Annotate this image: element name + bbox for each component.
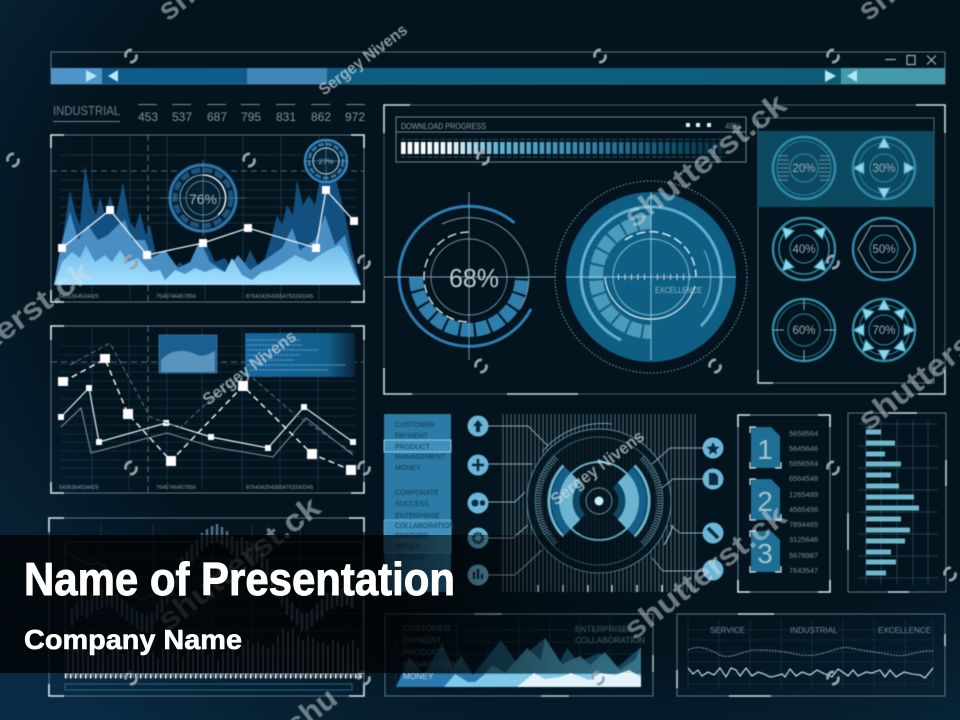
panel: layered area chart: PAYMENT: [403, 635, 442, 645]
panel: wave chart: INDUSTRIAL: [790, 626, 838, 635]
number row: 862: [311, 110, 331, 124]
watermark: shutterstock text: shutterst.ck: [617, 498, 793, 647]
dial: 60%: [773, 299, 835, 361]
icon: camera: [468, 492, 488, 514]
fan wedges: [576, 485, 622, 517]
panel: menu list: MONEY: [395, 465, 421, 472]
gauge: 27%: 27%: [318, 157, 334, 166]
icon: gear: [468, 528, 488, 548]
number list: 4565456: [789, 505, 818, 514]
candlesticks: [72, 524, 352, 633]
number list: 1265489: [789, 490, 818, 499]
axis labels: [59, 294, 313, 300]
number row: 453: [138, 110, 158, 124]
file 1: [750, 427, 781, 468]
dial rings: [527, 423, 673, 573]
gauge: 76%: 76%: [189, 191, 217, 207]
icon: star: [702, 438, 724, 458]
dial: 70%: [853, 299, 915, 361]
gauge: 68%: [384, 192, 556, 360]
panel: menu list: CORPORATE: [395, 490, 439, 497]
panel: candlestick chart: [49, 518, 364, 696]
dial: 50%: 50%: [872, 244, 896, 256]
title band: [0, 535, 660, 673]
dial: 40%: 40%: [792, 244, 816, 256]
panel: layered area chart: [385, 614, 653, 696]
panel: main dashboard frame: [384, 105, 945, 394]
number list: 7894465: [789, 520, 818, 529]
connector lines: [488, 426, 703, 575]
area: light blue: [444, 674, 641, 687]
axis labels: [59, 485, 313, 491]
file 3: 3: [757, 538, 773, 569]
panel: layered area chart: CUSTOMER: [403, 623, 450, 633]
number list: 6564548: [789, 474, 818, 483]
panel: menu list: OFFICE: [395, 544, 421, 551]
area: back peaks: [396, 638, 641, 687]
axis labels: 5435364534425: [59, 485, 99, 491]
progress blocks: [401, 142, 725, 154]
subtitle: Company Name: [24, 624, 242, 655]
panel: percent dials: [758, 118, 934, 383]
dial: 60%: 60%: [792, 325, 816, 337]
area: dark layer: [54, 165, 361, 285]
area: mid layer: [54, 212, 361, 285]
number list: 3125646: [789, 535, 818, 544]
panel: menu list: SUCCESS: [395, 501, 429, 508]
panel: wave chart: SERVICE: [710, 626, 745, 635]
file 2: 2: [757, 486, 773, 517]
download progress: DOWNLOAD PROGRESS: [401, 121, 486, 131]
watermark: author text: Sergey Nivens: [547, 427, 648, 509]
thin solid series: [61, 408, 353, 457]
icon: up arrow: [468, 416, 488, 436]
icon: document: [702, 468, 724, 490]
icon: last circle: [702, 560, 724, 580]
watermark: shutterstock text: shutterst.ck: [151, 489, 327, 638]
dotted wave: [688, 647, 933, 656]
window controls: [885, 56, 936, 64]
panel: menu list: COLLABORATION: [395, 523, 454, 530]
panel: layered area chart: MANAGEMENT: [403, 659, 462, 669]
gauge: 27%: [304, 140, 348, 182]
panel: radial dial with icons: [468, 414, 724, 592]
number list: 5678987: [789, 551, 818, 560]
number list: 5659564: [789, 429, 818, 438]
axis labels: 7645746457856: [156, 294, 196, 300]
gauge: 68%: 68%: [449, 263, 499, 293]
dial: 30%: 30%: [872, 163, 896, 175]
number row: 831: [276, 110, 296, 124]
panel: line chart: [51, 326, 364, 493]
panel: layered area chart: COLLABORATION: [575, 635, 645, 645]
gauge: 76%: [160, 160, 246, 236]
panel: menu list: CUSTOMER: [395, 422, 435, 429]
panel: numbered files: [738, 415, 830, 592]
file 3: [750, 531, 781, 572]
area: blue band: [396, 674, 641, 687]
volume bars: [68, 628, 358, 676]
panel: wave chart: EXCELLENCE: [878, 626, 931, 635]
panel: mountain chart: [51, 135, 364, 302]
bottom ticks: [538, 585, 662, 592]
dial: 30%: [853, 137, 915, 199]
gauge: excellence: [555, 181, 747, 373]
number list: 5956564: [789, 459, 818, 468]
panel: menu list: PRODUCT: [395, 444, 430, 451]
icon: bars: [468, 564, 488, 586]
panel: menu list: ENTERPRISE: [395, 513, 440, 520]
download progress: 48%: [725, 122, 741, 131]
panel: menu list: PARTNER: [395, 533, 428, 540]
panel: layered area chart: PRODUCT: [403, 647, 444, 657]
number row: 687: [207, 110, 227, 124]
number row: 795: [241, 110, 261, 124]
panel: menu list: SERVICE: [395, 554, 426, 561]
number list: 7643547: [789, 566, 818, 575]
thin dashed series: [70, 343, 353, 453]
trend line: [66, 552, 165, 600]
panel: layered area chart: ENTERPRISE: [575, 624, 628, 634]
number row: 972: [345, 110, 365, 124]
panel: menu list: MANAGEMENT: [395, 454, 446, 461]
dial: 20%: 20%: [792, 163, 816, 175]
heading: industrial: INDUSTRIAL: [53, 104, 120, 118]
dial: 50%: [853, 218, 915, 280]
area: white: [517, 670, 641, 687]
dashed series: [58, 354, 356, 475]
status squares: [686, 123, 711, 127]
dial: 70%: 70%: [872, 325, 896, 337]
number list: 5645646: [789, 444, 818, 453]
panel: wave chart: [677, 614, 945, 696]
download progress: [396, 117, 746, 162]
axis labels: 7645746457856: [156, 485, 196, 491]
number list: [789, 429, 818, 575]
line series with markers: [58, 186, 358, 259]
panel: menu list: PAYMENT: [395, 433, 429, 440]
title: Name of Presentation: [24, 553, 455, 605]
solid series: [58, 385, 356, 451]
gauge: excellence: EXCELLENCE: [655, 286, 702, 295]
panel: menu list: [384, 414, 454, 592]
axis labels: 8764342543654753243245: [246, 485, 313, 491]
watermark: author text: [199, 20, 648, 509]
area: middle peaks: [470, 638, 641, 687]
file 2: [750, 479, 781, 520]
window bar: [51, 52, 945, 84]
watermark: author text: Sergey Nivens: [199, 327, 300, 409]
stripe field: [503, 414, 695, 592]
file 1: 1: [757, 434, 773, 465]
axis labels: 5435364534425: [59, 294, 99, 300]
axis labels: 8764342543654753243245: [246, 294, 313, 300]
dial: 20%: [773, 137, 835, 199]
icon: plus: [468, 454, 488, 476]
panel: layered area chart: MONEY: [403, 671, 434, 681]
watermark: author text: Sergey Nivens: [315, 20, 411, 99]
number row: 537: [172, 110, 192, 124]
small text panel: [245, 333, 355, 377]
small wave chart: [159, 335, 217, 373]
watermark: shutterstock text: shutterst.ck: [617, 86, 793, 235]
icon: pencil: [702, 522, 724, 544]
dial: 40%: [773, 218, 835, 280]
area: light layer: [54, 245, 361, 285]
number row: [138, 104, 365, 124]
solid wave: [688, 668, 933, 678]
panel: horizontal bars: [848, 413, 946, 592]
